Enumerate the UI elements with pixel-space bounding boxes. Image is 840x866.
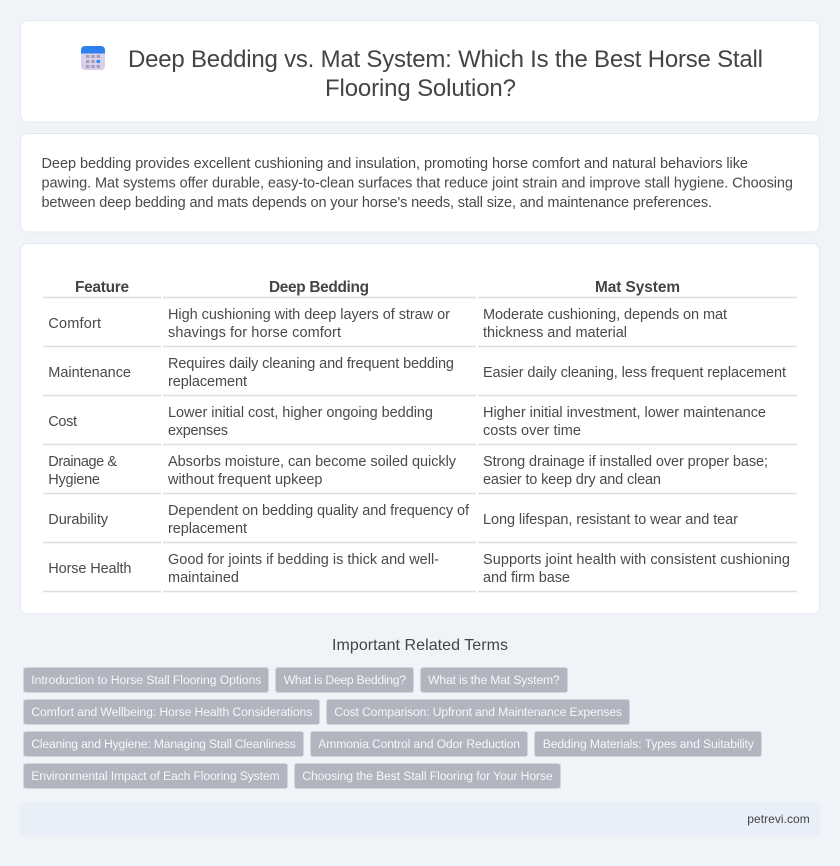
row: drainage and hygiene: easier to keep dry and clean bbox=[483, 472, 661, 488]
row: drainage and hygiene: Absorbs moisture, can become soiled quickly bbox=[168, 454, 457, 470]
footer bar bbox=[20, 802, 820, 836]
related term tags: What is the Mat System? bbox=[428, 673, 560, 687]
row: maintenance: replacement bbox=[168, 374, 247, 390]
table header row: Feature bbox=[75, 279, 129, 296]
title: Flooring Solution? bbox=[325, 75, 516, 102]
related term tags: Ammonia Control and Odor Reduction bbox=[318, 737, 520, 751]
related term tags: What is Deep Bedding? bbox=[284, 673, 406, 687]
heading: important related terms: Important Related Terms bbox=[332, 637, 508, 654]
row: maintenance: Easier daily cleaning, less frequent replacement bbox=[483, 365, 786, 381]
row: comfort bbox=[48, 307, 727, 341]
related term tags: Bedding Materials: Types and Suitability bbox=[543, 737, 755, 751]
row: horse health: Good for joints if bedding is thick and well- bbox=[168, 552, 439, 568]
intro text: Deep bedding provides excellent cushioning and insulation, promoting horse comfort and natural behaviors like bbox=[42, 156, 748, 172]
row: comfort: shavings for horse comfort bbox=[168, 325, 341, 341]
intro text bbox=[42, 156, 793, 211]
table header row: Mat System bbox=[595, 279, 680, 296]
row: durability bbox=[48, 503, 738, 537]
row: horse health: Horse Health bbox=[48, 561, 131, 577]
table header row: Deep Bedding bbox=[269, 279, 369, 296]
table header row bbox=[75, 279, 680, 296]
intro text: pawing. Mat systems offer durable, easy-to-clean surfaces that reduce joint strain and improve stall hygiene. Choosing bbox=[42, 176, 793, 192]
title: Deep Bedding vs. Mat System: Which Is the Best Horse Stall bbox=[128, 46, 763, 73]
row: horse health: and firm base bbox=[483, 570, 570, 586]
intro text: between deep bedding and mats depends on your horse's needs, stall size, and maintenance preferences. bbox=[42, 195, 712, 211]
row: drainage and hygiene bbox=[48, 454, 768, 488]
row: durability: Dependent on bedding quality and frequency of bbox=[168, 503, 470, 519]
row: maintenance bbox=[48, 356, 786, 390]
row: drainage and hygiene: Drainage & bbox=[48, 454, 117, 470]
row: horse health bbox=[48, 552, 790, 586]
row: cost: costs over time bbox=[483, 423, 581, 439]
row: comfort: Comfort bbox=[48, 316, 101, 332]
related term tags bbox=[24, 668, 762, 788]
related term tags: Choosing the Best Stall Flooring for Your Horse bbox=[302, 769, 553, 783]
row: cost bbox=[48, 405, 766, 439]
related term tags: Environmental Impact of Each Flooring System bbox=[31, 769, 280, 783]
related term tags: Cost Comparison: Upfront and Maintenance Expenses bbox=[334, 705, 622, 719]
panel: introduction bbox=[20, 134, 820, 232]
row: cost: expenses bbox=[168, 423, 228, 439]
row: maintenance: Requires daily cleaning and frequent bedding bbox=[168, 356, 454, 372]
row: comfort: High cushioning with deep layers of straw or bbox=[168, 307, 450, 323]
row: maintenance: Maintenance bbox=[48, 365, 131, 381]
icon: calendar bbox=[81, 46, 105, 70]
related term tags: Cleaning and Hygiene: Managing Stall Cleanliness bbox=[31, 737, 296, 751]
title bbox=[128, 46, 763, 102]
row: drainage and hygiene: Hygiene bbox=[48, 472, 100, 488]
row: cost: Lower initial cost, higher ongoing bedding bbox=[168, 405, 433, 421]
panel: title header bbox=[20, 20, 820, 122]
footer bar: petrevi.com bbox=[747, 812, 810, 826]
row: horse health: maintained bbox=[168, 570, 239, 586]
row: drainage and hygiene: without frequent upkeep bbox=[167, 472, 322, 488]
row: cost: Cost bbox=[48, 414, 77, 430]
row: durability: Durability bbox=[48, 512, 109, 528]
row: horse health: Supports joint health with consistent cushioning bbox=[483, 552, 790, 568]
row: drainage and hygiene: Strong drainage if installed over proper base; bbox=[483, 454, 768, 470]
row: comfort: thickness and material bbox=[483, 325, 627, 341]
table grid lines bbox=[43, 297, 797, 592]
row: cost: Higher initial investment, lower maintenance bbox=[483, 405, 766, 421]
related term tags: Comfort and Wellbeing: Horse Health Considerations bbox=[31, 705, 312, 719]
row: comfort: Moderate cushioning, depends on mat bbox=[483, 307, 727, 323]
related term tags: Introduction to Horse Stall Flooring Options bbox=[31, 673, 261, 687]
row: durability: Long lifespan, resistant to wear and tear bbox=[483, 512, 738, 528]
row: durability: replacement bbox=[168, 521, 247, 537]
panel: comparison table bbox=[20, 244, 820, 614]
